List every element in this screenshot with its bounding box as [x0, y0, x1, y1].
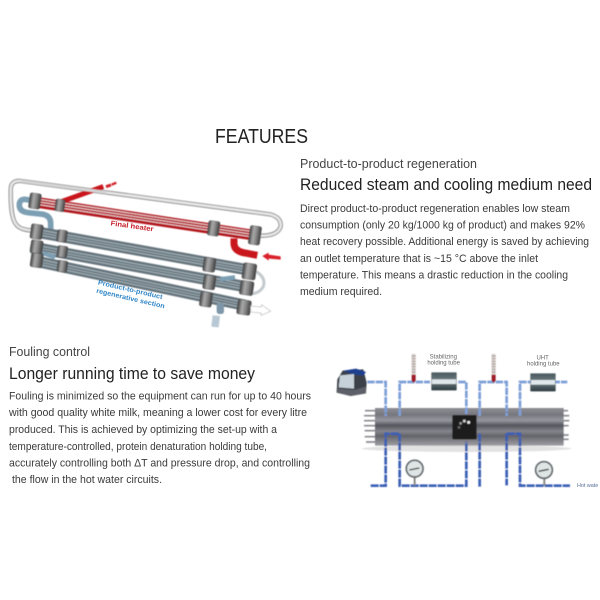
thermometer right	[492, 354, 496, 383]
diagram: regeneration tubes	[11, 181, 281, 327]
label: stabilizing holding tube	[427, 355, 461, 366]
body paragraph: temperature. This means a drastic reduction in the cooling	[300, 270, 568, 282]
red outlet pipe and arrow	[21, 181, 116, 203]
label: hot water: Hot wate	[577, 483, 598, 489]
section label: Fouling control	[9, 344, 90, 359]
body paragraph	[8, 390, 311, 486]
tube bank stub ends	[364, 411, 569, 442]
regenerative tubes, row 2	[37, 245, 247, 290]
diagram: fouling control process	[337, 354, 598, 489]
body paragraph: Direct product-to-product regeneration enables low steam	[300, 203, 570, 215]
stabilizing holding tube box	[431, 372, 457, 390]
section label: Product-to-product regeneration	[300, 156, 477, 171]
control unit	[337, 369, 367, 396]
text block: product-to-product regeneration	[300, 156, 592, 298]
grey return pipe	[11, 181, 281, 236]
text block: fouling control	[8, 344, 311, 486]
white outlet arrow	[251, 305, 271, 315]
dark-blue lower pipework	[371, 434, 570, 487]
section heading: Longer running time to save money	[9, 364, 255, 383]
final heater tubes	[37, 199, 257, 238]
label: regenerative section: regenerative section	[96, 288, 165, 310]
label: final heater: Final heater	[110, 220, 154, 233]
pressure gauge right	[536, 462, 552, 486]
label: regenerative section: Product-to-product	[97, 279, 164, 301]
label: regenerative section	[96, 279, 165, 310]
thermometer left	[412, 354, 416, 383]
red inlet arrow	[262, 253, 281, 261]
blue-grey crossover elbow	[19, 199, 51, 233]
regenerative tubes, row 3	[37, 259, 245, 308]
pressure gauge left	[406, 460, 423, 486]
body paragraph	[300, 203, 589, 298]
body paragraph: consumption (only 20 kg/1000 kg of product) and makes 92%	[300, 220, 585, 232]
tube bank	[375, 408, 564, 446]
black control panel	[452, 415, 477, 439]
label: stabilizing holding tube: holding tube	[427, 360, 461, 366]
shadow under tube bank	[362, 445, 572, 452]
light-blue upper pipework	[367, 382, 567, 416]
label: UHT holding tube: UHT	[536, 355, 549, 361]
label: stabilizing holding tube: Stabilizing	[430, 355, 457, 361]
body paragraph: Fouling is minimized so the equipment can run for up to 40 hours	[9, 390, 311, 402]
flanges	[28, 193, 262, 316]
body paragraph: with good quality white milk, meaning a lower cost for every litre	[8, 407, 307, 419]
body paragraph: heat recovery possible. Additional energy is saved by achieving	[300, 236, 589, 248]
body paragraph: the flow in the hot water circuits.	[12, 474, 162, 486]
red inlet pipe	[234, 238, 257, 255]
body paragraph: produced. This is achieved by optimizing the set-up with a	[9, 424, 278, 436]
product outlet valve and pipe	[211, 303, 224, 327]
body paragraph: an outlet temperature that is ~15 °C above the inlet	[300, 253, 538, 265]
body paragraph: accurately controlling both ΔT and pressure drop, and controlling	[9, 458, 310, 470]
body paragraph: medium required.	[300, 286, 382, 298]
body paragraph: temperature-controlled, protein denaturation holding tube,	[9, 441, 267, 453]
UHT holding tube box	[530, 373, 556, 391]
label: UHT holding tube	[527, 355, 560, 368]
regenerative tubes, row 1	[37, 229, 247, 272]
connectors between rows	[31, 245, 264, 294]
title: FEATURES	[215, 126, 308, 148]
label: UHT holding tube: holding tube	[527, 362, 560, 368]
